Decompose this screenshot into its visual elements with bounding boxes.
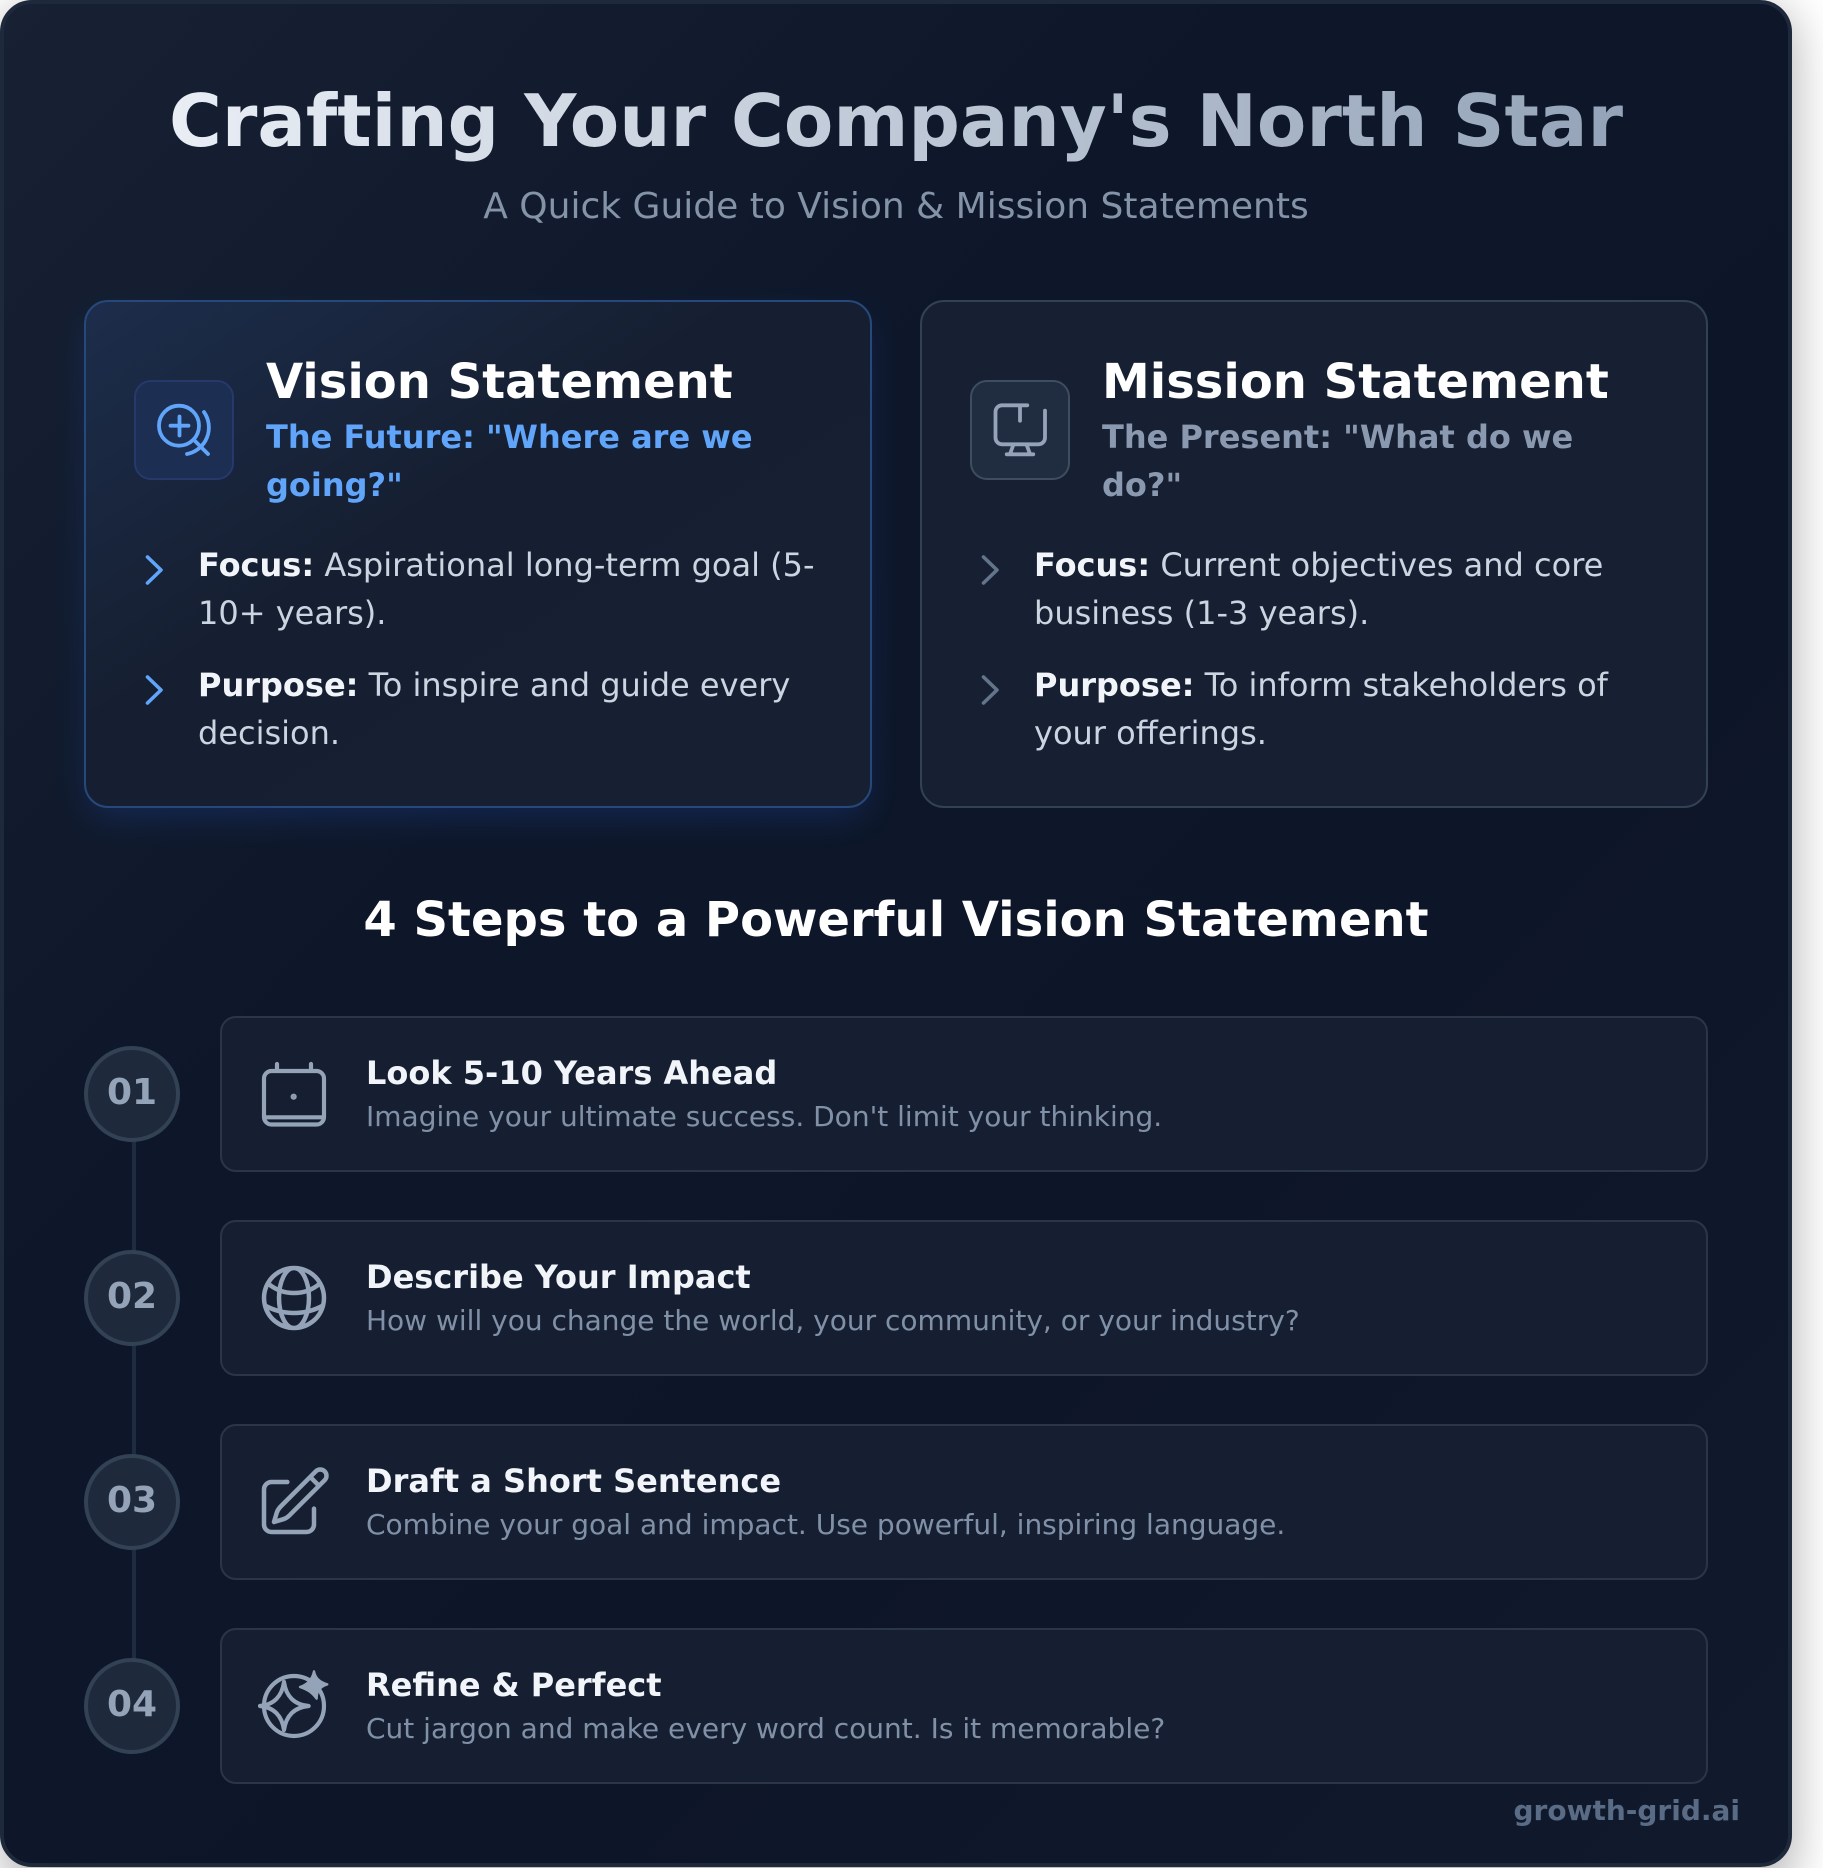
- step 2: [86, 1221, 1707, 1375]
- step 3 title: Draft a Short Sentence: [366, 1462, 781, 1500]
- step 4 number: 04: [107, 1684, 157, 1725]
- step 4 title: Refine & Perfect: [366, 1666, 662, 1704]
- vision focus text: Aspirational long-term goal (5-: [314, 546, 815, 584]
- step 3 description: Combine your goal and impact. Use powerful, inspiring language.: [366, 1508, 1285, 1541]
- vision heading: Vision Statement: [266, 354, 733, 410]
- icon: calendar: [264, 1064, 324, 1124]
- panel: mission statement: [921, 301, 1707, 807]
- icon: chevron: [148, 677, 161, 703]
- step 1 number: [86, 1048, 178, 1140]
- mission subheading: The Present: "What do we: [1102, 418, 1573, 456]
- footer brand: growth-grid.ai: [1513, 1794, 1740, 1827]
- icon: sparkles: [260, 1671, 327, 1736]
- step 2 title: Describe Your Impact: [366, 1258, 751, 1296]
- section heading: 4 Steps to a Powerful Vision Statement: [363, 892, 1429, 948]
- vision focus text: Focus:: [198, 546, 314, 584]
- mission focus text: Current objectives and core: [1150, 546, 1603, 584]
- step 4 number: [86, 1660, 178, 1752]
- vision subheading: The Future: "Where are we: [266, 418, 753, 456]
- mission focus text: Focus:: [1034, 546, 1150, 584]
- icon: monitor: [971, 381, 1069, 479]
- title: Crafting Your Company's North Star: [169, 79, 1623, 163]
- mission purpose text: your offerings.: [1034, 714, 1267, 752]
- panel: vision statement: [85, 301, 871, 817]
- icon: chevron: [984, 677, 997, 703]
- vision focus text: 10+ years).: [198, 594, 386, 632]
- step 3 number: 03: [107, 1480, 157, 1521]
- mission focus text: business (1-3 years).: [1034, 594, 1369, 632]
- step 1 number: 01: [107, 1072, 157, 1113]
- vision purpose text: Purpose:: [198, 666, 358, 704]
- timeline connector: [132, 1140, 136, 1660]
- icon: globe: [264, 1268, 324, 1328]
- step 2 description: How will you change the world, your community, or your industry?: [366, 1304, 1300, 1337]
- mission subheading: do?": [1102, 466, 1182, 504]
- vision purpose text: To inspire and guide every: [358, 666, 790, 704]
- subtitle: A Quick Guide to Vision & Mission Statements: [483, 186, 1309, 227]
- step 1 description: Imagine your ultimate success. Don't limit your thinking.: [366, 1100, 1162, 1133]
- icon: chevron: [984, 557, 997, 583]
- icon: chevron: [148, 557, 161, 583]
- step 4 description: Cut jargon and make every word count. Is it memorable?: [366, 1712, 1165, 1745]
- icon: pencil square: [264, 1469, 326, 1532]
- mission heading: Mission Statement: [1102, 354, 1609, 410]
- icon: magnifier with plus: [135, 381, 233, 479]
- step 3 number: [86, 1456, 178, 1548]
- step 2 number: [86, 1252, 178, 1344]
- step 1: [86, 1017, 1707, 1171]
- vision purpose text: decision.: [198, 714, 340, 752]
- step 1 title: Look 5-10 Years Ahead: [366, 1054, 777, 1092]
- mission purpose text: To inform stakeholders of: [1194, 666, 1609, 704]
- mission purpose text: Purpose:: [1034, 666, 1194, 704]
- vision subheading: going?": [266, 466, 403, 504]
- step 3: [86, 1425, 1707, 1579]
- step 2 number: 02: [107, 1276, 157, 1317]
- step 4: [86, 1629, 1707, 1783]
